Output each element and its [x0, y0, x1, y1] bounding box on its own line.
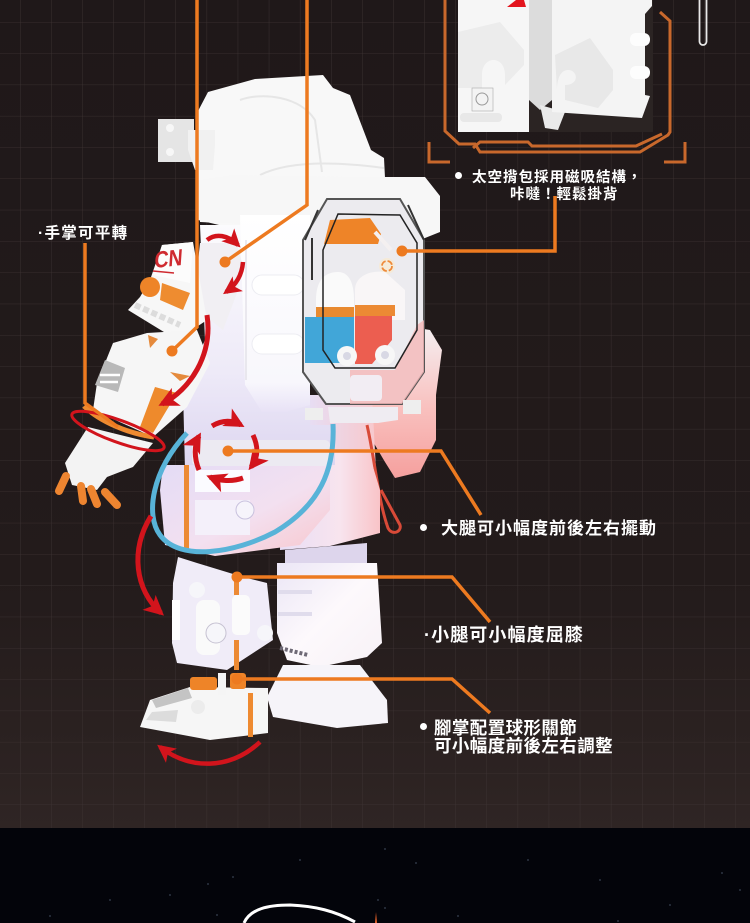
footer curve and spark: [244, 905, 377, 923]
backpack shoulder block: [198, 175, 440, 240]
arrow: knee: [138, 516, 161, 613]
backpack detail photo: [458, 0, 653, 132]
hip: [160, 465, 330, 556]
shoulder: [195, 243, 243, 330]
label: calf: ·小腿可小幅度屈膝: [424, 625, 584, 645]
backpack detail frame: [429, 0, 685, 162]
arrow: hip: [212, 421, 241, 426]
transparent capsule: [303, 199, 424, 423]
leader: palm: [85, 243, 118, 427]
blue bottle: [316, 272, 354, 362]
far arm, pink: [372, 325, 442, 478]
waist back filler: [305, 395, 376, 470]
near forearm: [93, 330, 210, 437]
leader: foot: [237, 679, 490, 713]
orange block: [324, 218, 381, 244]
blue hose: [153, 424, 333, 552]
arrow: shoulder: [207, 236, 238, 245]
capsule inner frame: [323, 214, 417, 368]
helmet contour shading: [240, 96, 384, 175]
knee joint: [285, 543, 367, 565]
leader: forearm: [172, 0, 197, 351]
hip orange strip: [184, 465, 189, 550]
label: thigh: 大腿可小幅度前後左右擺動: [441, 519, 657, 538]
arrow: wrist: [68, 404, 168, 458]
shin: [277, 563, 382, 667]
leader: thigh: [228, 451, 481, 515]
arrow: foot: [160, 742, 260, 764]
boot: [267, 665, 388, 728]
red rotation arrows: [68, 236, 260, 764]
label: backpack: 咔噠！輕鬆掛背: [510, 185, 618, 203]
near lower leg mechanism: [172, 557, 273, 670]
leader: shoulder: [225, 0, 307, 262]
red hose: [367, 425, 400, 532]
leader dots: [166, 246, 408, 684]
helmet side bracket: [158, 119, 215, 170]
wrist orange ring: [84, 406, 154, 437]
near foot: [140, 673, 268, 740]
white capsule outline: [700, 0, 706, 45]
capsule base: [328, 407, 398, 423]
CN patch: CN: [154, 244, 183, 273]
helmet: [196, 75, 385, 230]
label: backpack: [455, 168, 642, 203]
orange leader lines: [85, 0, 555, 713]
leader: calf: [237, 577, 490, 622]
waist joint: [192, 440, 330, 466]
red bottle: [355, 272, 405, 320]
leader: backpack: [402, 196, 555, 251]
hip white details: [195, 470, 254, 535]
starfield footer: [0, 828, 750, 923]
label: foot: [420, 718, 613, 756]
near hand: [59, 427, 153, 505]
label: foot: 可小幅度前後左右調整: [434, 736, 613, 756]
near upper arm: [128, 242, 243, 340]
valves: [337, 346, 357, 366]
backpack side plate: [240, 215, 310, 412]
label: palm: ·手掌可平轉: [38, 223, 128, 242]
label: foot: 腳掌配置球形關節: [434, 718, 577, 738]
label: backpack: 太空揹包採用磁吸結構，: [472, 168, 642, 186]
arrow: elbow: [162, 315, 208, 404]
shoulder orange parts: [140, 277, 160, 297]
arm block: [128, 242, 207, 340]
thigh: [280, 450, 380, 550]
far leg: [267, 450, 388, 728]
rotation badge: [379, 258, 395, 274]
torso: [183, 225, 335, 470]
